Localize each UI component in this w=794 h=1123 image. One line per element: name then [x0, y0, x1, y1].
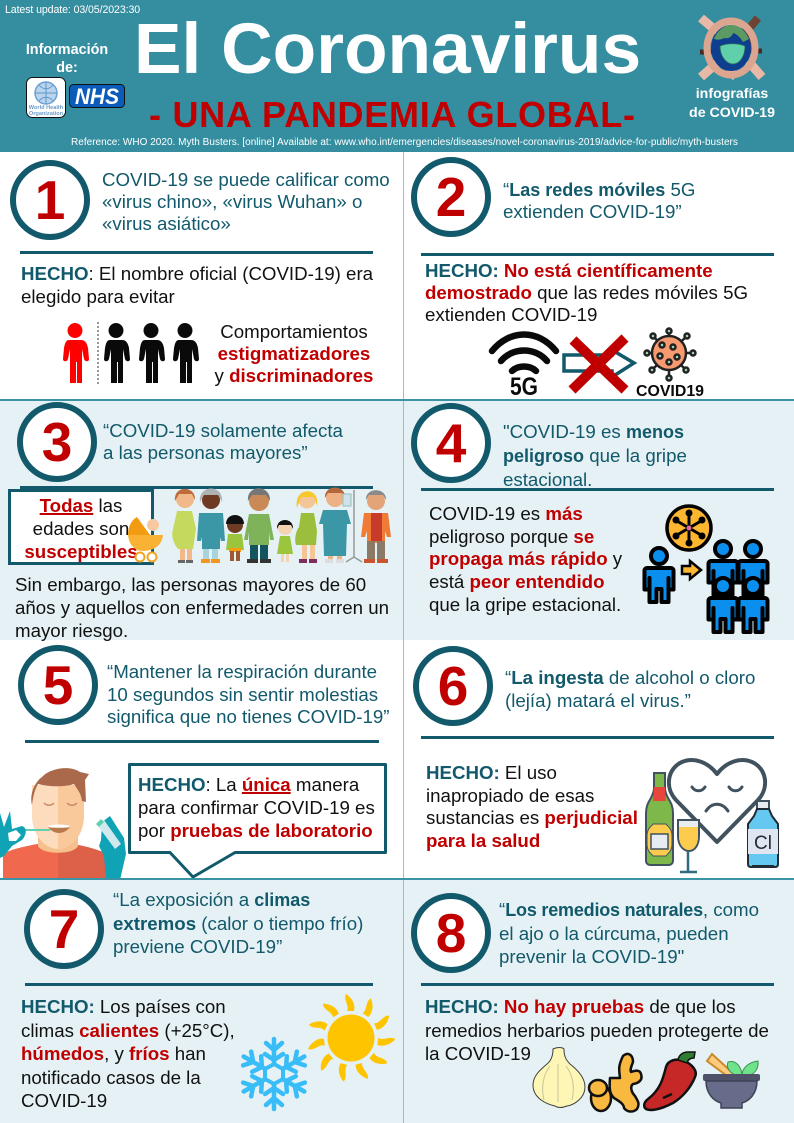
fact 6: HECHO: El uso — [426, 762, 557, 783]
information source label: de: — [56, 60, 78, 76]
fact 4: propaga más rápido y — [429, 548, 622, 569]
myth 3 statement — [103, 420, 343, 463]
older people risk text: Sin embargo, las personas mayores de 60 — [15, 574, 366, 595]
pregnant woman — [172, 489, 196, 563]
myth 8 statement: “Los remedios naturales, como — [499, 899, 759, 920]
panel: myth 6 — [413, 646, 779, 874]
icon: 5G crossed arrow to virus: COVID19 — [636, 383, 704, 400]
myth 7 statement: previene COVID-19” — [113, 936, 282, 957]
icon: globe with mask held by hands — [698, 14, 766, 80]
number 6: 6 — [438, 655, 468, 717]
older people risk text: mayor riesgo. — [15, 620, 128, 641]
information source label — [26, 42, 108, 76]
myth 1 statement: «virus chino», «virus Wuhan» o — [102, 191, 362, 212]
fact 7: notificado casos de la — [21, 1066, 201, 1088]
myth 8 statement — [499, 899, 759, 967]
header banner — [0, 0, 794, 152]
fact 1: elegido para evitar — [21, 286, 175, 306]
older people risk text: años y aquellos con enfermedades corren un — [15, 597, 389, 618]
stigmatising behaviours text: y discriminadores — [215, 365, 373, 386]
myth 1 statement: COVID-19 se puede calificar como — [102, 169, 390, 190]
fact 7: climas calientes (+25°C), — [21, 1020, 235, 1040]
icon: alcohol, chlorine and sad heart: Cl — [754, 833, 772, 854]
number 3 — [17, 402, 97, 482]
number 6 — [413, 646, 493, 726]
number 3: 3 — [42, 411, 72, 473]
panel: myth 3 — [0, 400, 403, 640]
fact 1 — [21, 263, 374, 307]
fact 2 — [425, 260, 748, 325]
panel: myth 2 — [411, 157, 774, 401]
fact 6: para la salud — [426, 830, 540, 851]
fact 8: la COVID-19 — [425, 1043, 531, 1064]
fact 5: HECHO: La única manera — [138, 774, 359, 795]
logo: WHO: Organization — [29, 111, 64, 117]
myth 8 statement: prevenir la COVID-19" — [499, 946, 684, 967]
myth 4 statement: peligroso que la gripe — [503, 445, 687, 466]
myth 2 statement: “Las redes móviles 5G — [503, 179, 695, 200]
number 4: 4 — [436, 412, 466, 474]
fact 7 — [21, 996, 235, 1111]
panel: myth 7 — [0, 880, 403, 1123]
callout: all ages — [8, 489, 154, 565]
fact 2: extienden COVID-19 — [425, 304, 597, 325]
fact 4: COVID-19 es más — [429, 503, 583, 524]
pregnant blonde woman — [295, 491, 317, 563]
myth 3 statement: a las personas mayores” — [103, 442, 308, 463]
panel: myth 1 — [10, 160, 390, 386]
callout: all ages: Todas las — [40, 495, 122, 516]
icon: alcohol, chlorine and sad heart — [645, 758, 779, 874]
myth 7 statement: “La exposición a climas — [113, 889, 310, 910]
fact 4: está peor entendido — [429, 571, 604, 592]
panel: myth 5 — [0, 645, 390, 878]
fact 4: peligroso porque se — [429, 526, 594, 547]
icon: virus spreading between people — [642, 504, 770, 634]
baby — [128, 517, 163, 562]
logo: WHO — [26, 77, 66, 118]
myth 1 statement — [102, 169, 390, 234]
logo: NHS: NHS — [75, 84, 119, 109]
number 5: 5 — [43, 654, 73, 716]
fact 5 — [138, 774, 375, 841]
panel: myth 4 — [403, 400, 794, 640]
myth 6 statement — [505, 667, 755, 711]
fact 7: COVID-19 — [21, 1090, 107, 1111]
fact 5: por pruebas de laboratorio — [138, 820, 373, 841]
reference line: Reference: WHO 2020. Myth Busters. [online] Available at: www.who.int/emergencies/diseases/novel-coronavirus-2019/advice-for-public/myth-busters — [71, 137, 738, 148]
man — [244, 488, 274, 563]
number 5 — [18, 645, 98, 725]
fact 1: HECHO: El nombre oficial (COVID-19) era — [21, 263, 373, 284]
number 8: 8 — [436, 902, 466, 964]
myth 4 statement: "COVID-19 es menos — [503, 421, 684, 442]
illustration: baby and people of all ages — [128, 488, 391, 563]
infographics label: de COVID-19 — [689, 105, 775, 121]
icon: 5G crossed arrow to virus: 5G — [510, 373, 538, 401]
grandfather — [361, 490, 391, 563]
myth 4 statement: estacional. — [503, 469, 592, 490]
icon: snowflake and sun — [240, 994, 396, 1112]
grandmother — [197, 488, 225, 563]
myth 8 statement: el ajo o la cúrcuma, pueden — [499, 923, 729, 944]
myth 7 statement — [113, 889, 363, 957]
stigmatising behaviours text: Comportamientos — [220, 321, 368, 342]
number 7: 7 — [49, 898, 79, 960]
fact 6: inapropiado de esas — [426, 785, 594, 806]
myth 5 statement: significa que no tienes COVID-19” — [107, 706, 390, 727]
callout: laboratory tests — [128, 763, 387, 878]
myth 5 statement — [107, 661, 390, 727]
infographics label — [689, 86, 775, 121]
myth 7 statement: extremos (calor o tiempo frío) — [113, 913, 363, 934]
myth 5 statement: 10 segundos sin sentir molestias — [107, 684, 378, 704]
icon: garlic, ginger, chili and mortar — [532, 1047, 760, 1113]
number 7 — [24, 889, 104, 969]
last update stamp: Latest update: 03/05/2023:30 — [5, 4, 140, 16]
title: El Coronavirus — [134, 9, 641, 89]
fact 2: demostrado que las redes móviles 5G — [425, 282, 748, 303]
fact 4 — [429, 503, 622, 615]
fact 8: remedios herbarios pueden protegerte de — [425, 1020, 769, 1040]
logo: WHO: World Health — [29, 105, 64, 111]
myth 3 statement: “COVID-19 solamente afecta — [103, 420, 343, 441]
illustration: man taking a swab test — [0, 768, 126, 878]
callout: all ages: susceptibles — [24, 541, 138, 562]
number 4 — [411, 403, 491, 483]
number 8 — [411, 893, 491, 973]
patient with IV stand — [319, 488, 362, 563]
fact 8 — [425, 996, 769, 1064]
panel: myth 8 — [403, 880, 794, 1123]
fact 6: sustancias es perjudicial — [426, 807, 638, 828]
girl — [277, 520, 293, 562]
number 1: 1 — [35, 169, 65, 231]
number 2 — [411, 157, 491, 237]
number 1 — [10, 160, 90, 240]
subtitle: - UNA PANDEMIA GLOBAL- — [149, 94, 636, 135]
fact 2: HECHO: No está científicamente — [425, 260, 713, 281]
myth 4 statement — [503, 421, 687, 490]
fact 7: húmedos, y fríos han — [21, 1043, 206, 1064]
stigmatising behaviours text: estigmatizadores — [218, 343, 370, 364]
callout: all ages: edades son — [33, 518, 129, 539]
fact 5: para confirmar COVID-19 es — [138, 797, 375, 818]
fact 7: HECHO: Los países con — [21, 996, 226, 1017]
icon: 5G crossed arrow to virus — [488, 327, 704, 401]
fact 6 — [426, 762, 638, 851]
icon: one person singled out from group — [63, 322, 199, 384]
information source label: Información — [26, 42, 108, 58]
myth 2 statement: extienden COVID-19” — [503, 201, 682, 222]
myth 6 statement: (lejía) matará el virus.” — [505, 690, 691, 711]
myth 5 statement: “Mantener la respiración durante — [107, 661, 377, 682]
myth 6 statement: “La ingesta de alcohol o cloro — [505, 667, 755, 688]
myth 1 statement: «virus asiático» — [102, 213, 231, 234]
fact 8: HECHO: No hay pruebas de que los — [425, 996, 736, 1017]
infographics label: infografías — [696, 86, 768, 102]
stigmatising behaviours text — [214, 321, 373, 386]
boy — [226, 515, 244, 561]
myth 2 statement — [503, 179, 695, 222]
number 2: 2 — [436, 166, 466, 228]
older people risk text — [15, 574, 389, 641]
fact 4: que la gripe estacional. — [429, 594, 621, 615]
